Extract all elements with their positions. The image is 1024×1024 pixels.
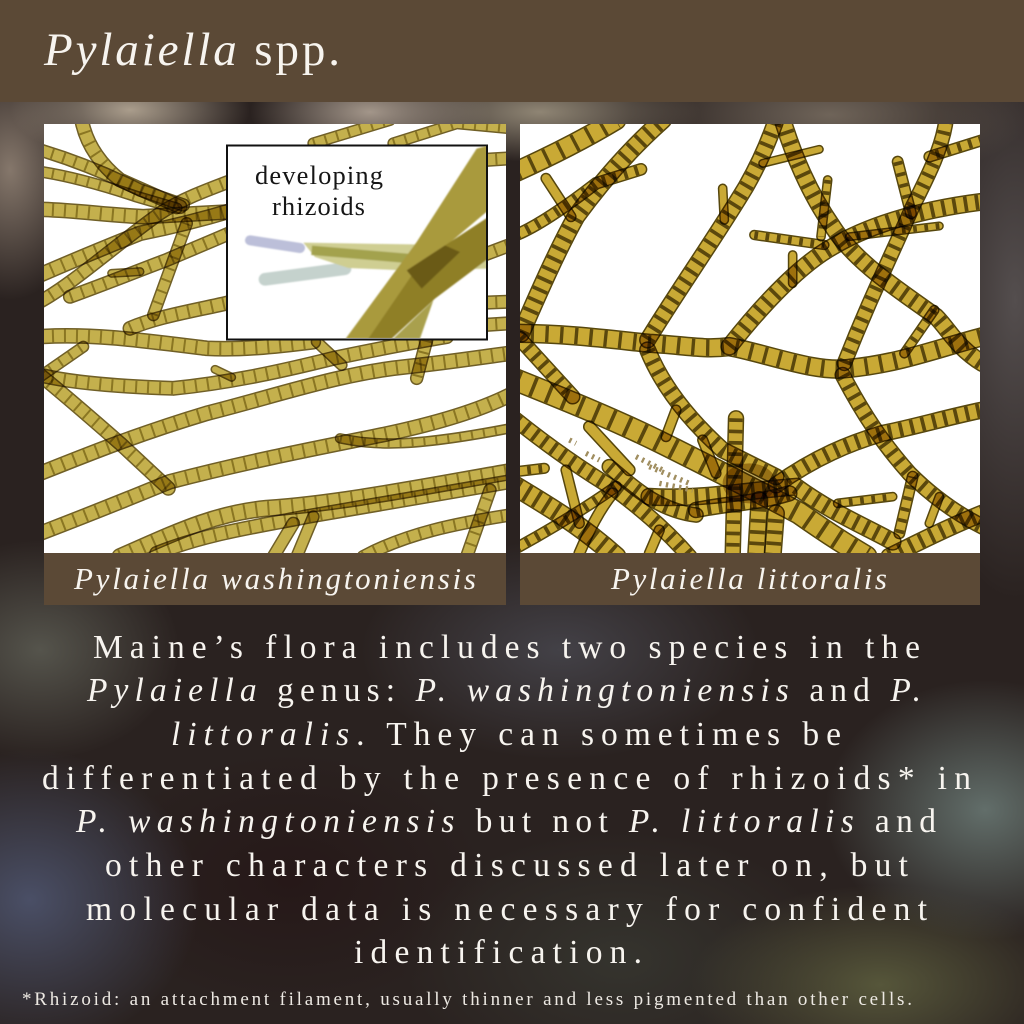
footnote: *Rhizoid: an attachment filament, usually thinner and less pigmented than other cells. bbox=[22, 989, 912, 1010]
caption: littoralis: Pylaiella littoralis bbox=[610, 561, 887, 596]
panel: Pylaiella washingtoniensis bbox=[40, 120, 510, 605]
body paragraph: other characters discussed later on, but bbox=[105, 847, 909, 884]
title: Pylaiella spp. bbox=[43, 24, 340, 76]
inset: developing rhizoids bbox=[227, 145, 488, 340]
caption: littoralis bbox=[520, 553, 980, 605]
body paragraph: P. washingtoniensis but not P. littoralis and bbox=[75, 803, 936, 840]
body paragraph: littoralis. They can sometimes be bbox=[171, 716, 841, 753]
body paragraph: Maine’s flora includes two species in the bbox=[93, 629, 920, 666]
body paragraph: molecular data is necessary for confident bbox=[86, 891, 928, 928]
body paragraph: identification. bbox=[354, 934, 642, 971]
title band bbox=[0, 0, 1024, 102]
inset micrograph bbox=[250, 145, 488, 339]
body paragraph: differentiated by the presence of rhizoids* in bbox=[42, 760, 971, 797]
photo: washingtoniensis filaments bbox=[40, 120, 510, 560]
body paragraph: Pylaiella genus: P. washingtoniensis and P. bbox=[86, 672, 921, 709]
caption: washingtoniensis: Pylaiella washingtoniensis bbox=[73, 561, 476, 596]
inset label bbox=[255, 160, 383, 221]
inset label: rhizoids bbox=[272, 191, 365, 221]
body paragraph bbox=[42, 629, 971, 971]
panel: Pylaiella littoralis bbox=[516, 120, 986, 605]
caption: washingtoniensis bbox=[44, 553, 506, 605]
inset label: developing bbox=[255, 160, 383, 190]
photo: littoralis filaments bbox=[516, 120, 986, 560]
